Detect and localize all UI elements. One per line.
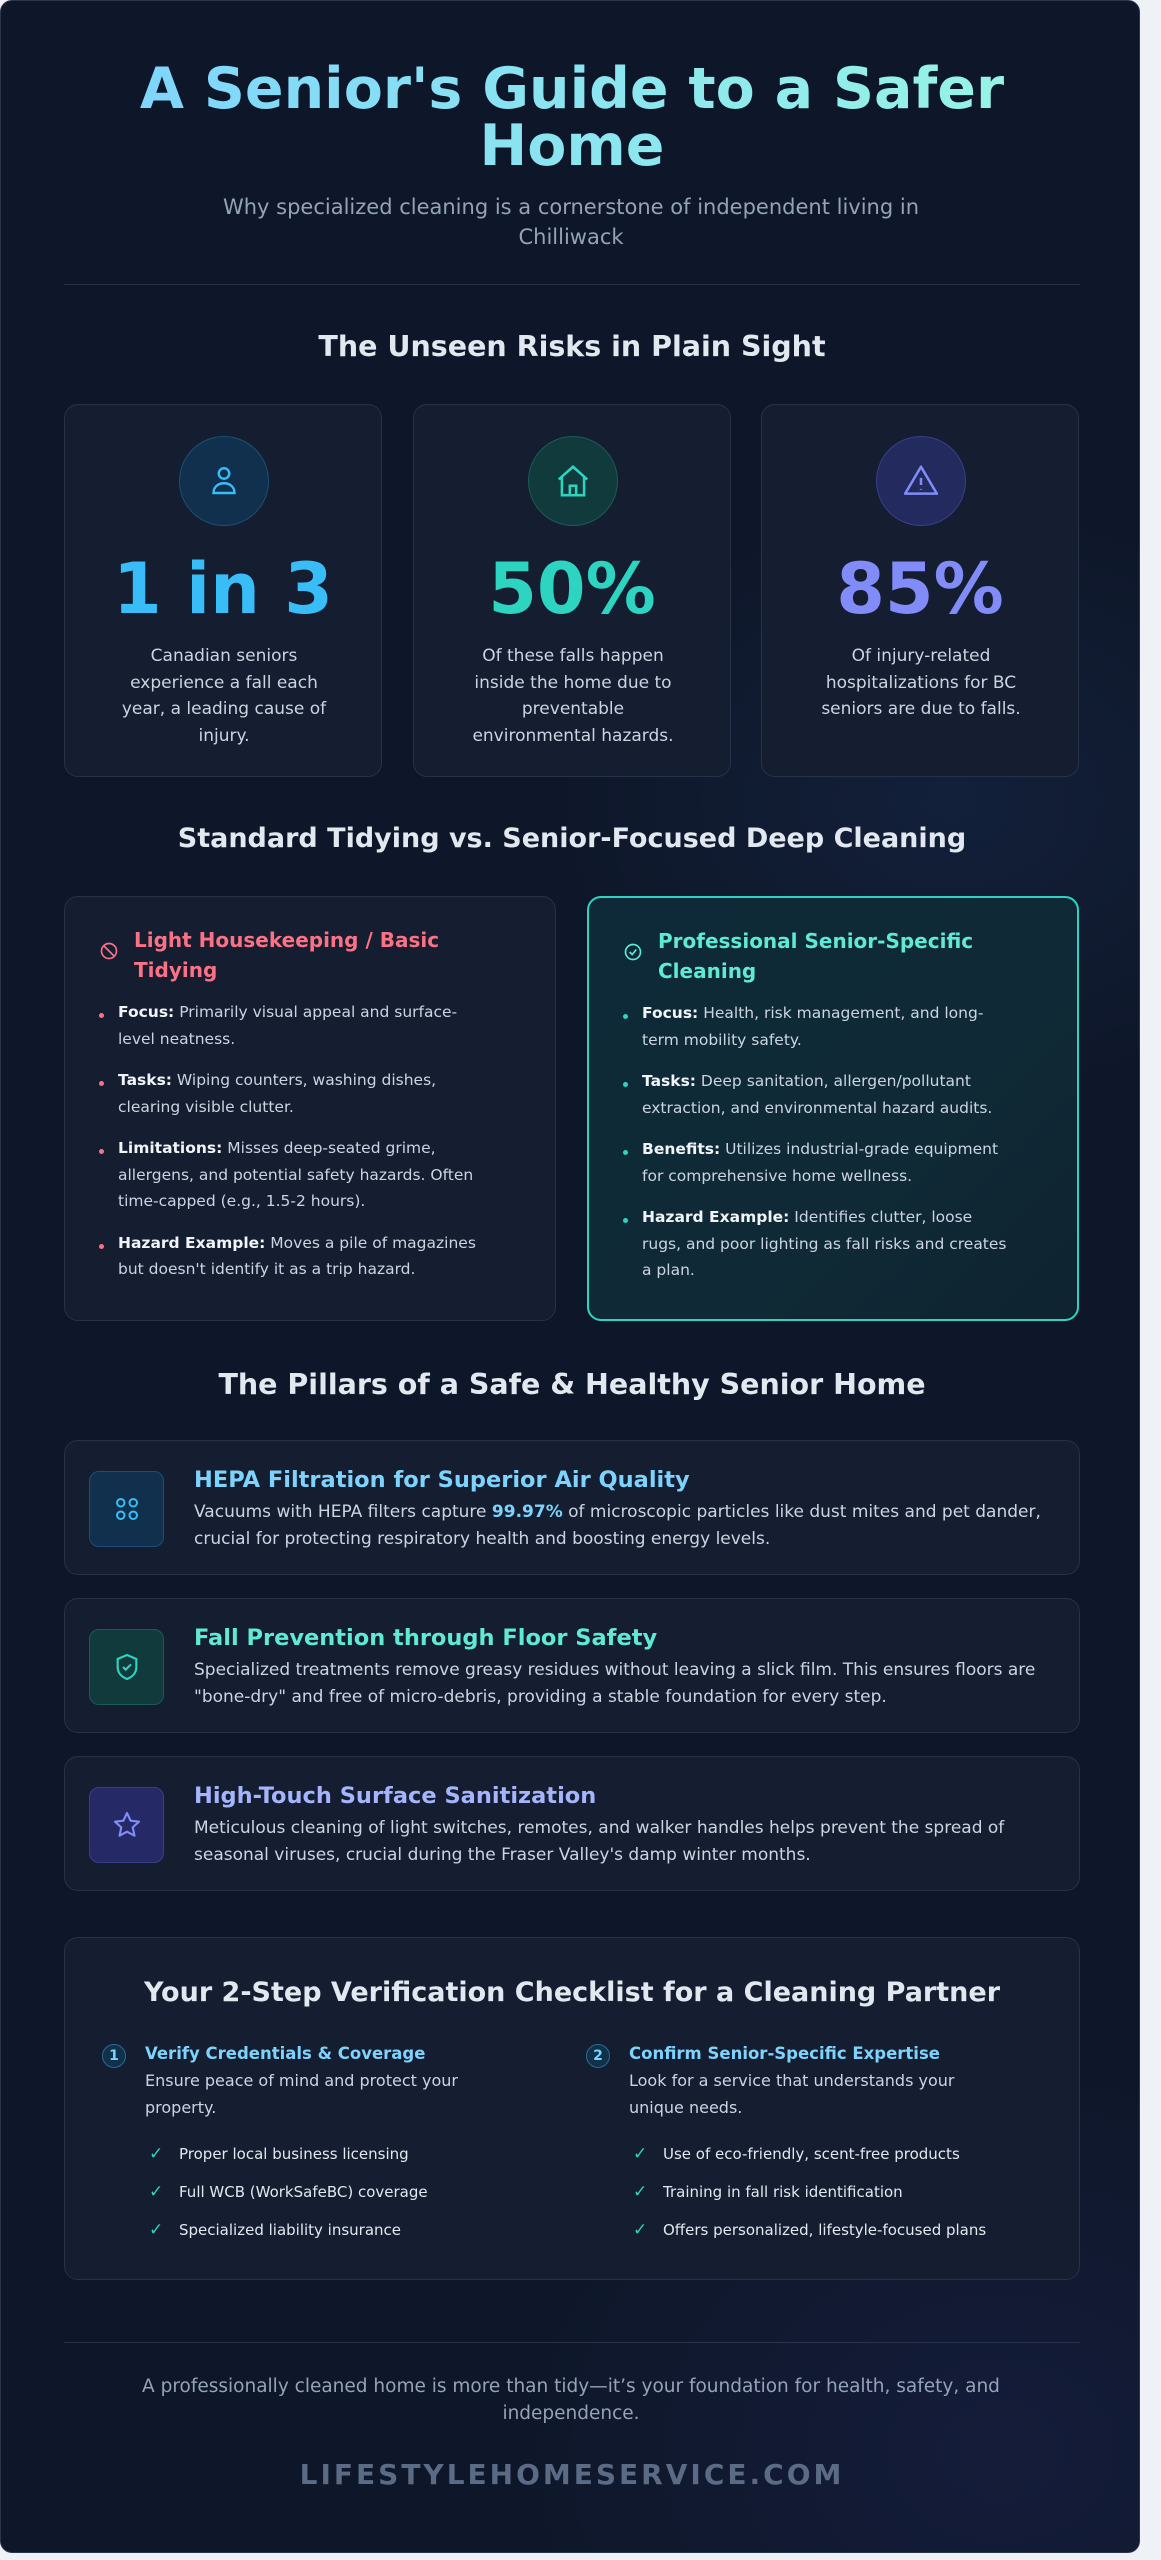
step 2: Use of eco-friendly, scent-free products [663, 2145, 960, 2163]
step 2: 2 [593, 2048, 603, 2064]
icon: house [528, 436, 618, 526]
pillar title: High-Touch Surface Sanitization [194, 1783, 596, 1809]
heading: pillars: The Pillars of a Safe & Healthy Senior Home [218, 1368, 926, 1401]
bullet list: Focus: Primarily visual appeal and surface-level neatness. [118, 1003, 457, 1048]
heading: comparison: Standard Tidying vs. Senior-Focused Deep Cleaning [178, 823, 966, 854]
title [64, 61, 1080, 175]
panel: professional cleaning [587, 896, 1079, 1321]
panel: light housekeeping [64, 896, 556, 1321]
stat text: Of injury-related hospitalizations for BC seniors are due to falls. [821, 646, 1021, 719]
step 1: Specialized liability insurance [179, 2221, 401, 2239]
pillar: HEPA [64, 1440, 1080, 1575]
step 2: Offers personalized, lifestyle-focused plans [663, 2221, 986, 2239]
step 2 [586, 2044, 986, 2239]
bullet list: Tasks: Wiping counters, washing dishes, clearing visible clutter. [118, 1071, 436, 1116]
footer text: A professionally cleaned home is more than tidy—it’s your foundation for health, safety, and independence. [142, 2376, 1000, 2424]
pillar text: Vacuums with HEPA filters capture 99.97% of microscopic particles like dust mites and pet dander, crucial for protecting respiratory health and boosting energy levels. [194, 1502, 1041, 1549]
icon: warning [876, 436, 966, 526]
step 1: Proper local business licensing [179, 2145, 409, 2163]
pillar text: Meticulous cleaning of light switches, remotes, and walker handles helps prevent the spread of seasonal viruses, crucial during the Fraser Valley's damp winter months. [194, 1818, 1004, 1865]
bullet list: Limitations: Misses deep-seated grime, allergens, and potential safety hazards. Often time-capped (e.g., 1.5-2 hours). [118, 1139, 473, 1210]
bullet list: Hazard Example: Identifies clutter, loose rugs, and poor lighting as fall risks and creates a plan. [642, 1208, 1006, 1279]
icon: filter [89, 1471, 164, 1547]
step 2: Confirm Senior-Specific Expertise [629, 2044, 940, 2063]
stat number: 50% [488, 548, 656, 630]
stat card 3 [761, 404, 1079, 777]
bullet list [99, 1003, 476, 1278]
pillar title: Fall Prevention through Floor Safety [194, 1625, 657, 1651]
step 1: 1 [109, 2048, 119, 2064]
step 1: Ensure peace of mind and protect your property. [145, 2071, 458, 2117]
step 2: Look for a service that understands your unique needs. [629, 2071, 954, 2117]
step 1: Verify Credentials & Coverage [145, 2044, 425, 2063]
icon: person [179, 436, 269, 526]
pillar: sanitization [64, 1756, 1080, 1891]
step 1: Full WCB (WorkSafeBC) coverage [179, 2183, 428, 2201]
footer brand: LIFESTYLEHOMESERVICE.COM [300, 2458, 844, 2491]
stat number: 85% [836, 548, 1004, 630]
checklist heading: Your 2-Step Verification Checklist for a Cleaning Partner [144, 1977, 1000, 2008]
stat text: Canadian seniors experience a fall each year, a leading cause of injury. [122, 646, 326, 746]
title: Home [480, 113, 664, 179]
bullet list: Benefits: Utilizes industrial-grade equipment for comprehensive home wellness. [642, 1140, 998, 1184]
pillar: fall prevention [64, 1598, 1080, 1733]
stat number: 1 in 3 [113, 548, 333, 630]
subtitle: Why specialized cleaning is a cornerstone of independent living in Chilliwack [223, 195, 919, 249]
panel title: Light Housekeeping / Basic Tidying [134, 928, 439, 982]
step 2: Training in fall risk identification [663, 2183, 903, 2201]
title: A Senior's Guide to a Safer [140, 56, 1004, 122]
icon: shield [89, 1629, 164, 1705]
stat card 1 [64, 404, 382, 777]
bullet list: Focus: Health, risk management, and long-term mobility safety. [642, 1004, 983, 1048]
bullet list: Hazard Example: Moves a pile of magazines but doesn't identify it as a trip hazard. [118, 1234, 476, 1278]
stat text: Of these falls happen inside the home due to preventable environmental hazards. [472, 646, 674, 746]
bullet list [623, 1004, 1006, 1279]
panel title: Professional Senior-Specific Cleaning [658, 929, 973, 983]
panel: checklist [64, 1937, 1080, 2280]
pillar title: HEPA Filtration for Superior Air Quality [194, 1467, 690, 1493]
pillar text: Specialized treatments remove greasy residues without leaving a slick film. This ensures floors are "bone-dry" and free of micro-debris, providing a stable foundation for every step. [194, 1660, 1035, 1707]
heading: unseen risks: The Unseen Risks in Plain Sight [318, 330, 826, 363]
icon: star [89, 1787, 164, 1863]
bullet list: Tasks: Deep sanitation, allergen/pollutant extraction, and environmental hazard audits. [642, 1072, 992, 1116]
stat card 2 [413, 404, 731, 777]
step 1 [102, 2044, 458, 2239]
